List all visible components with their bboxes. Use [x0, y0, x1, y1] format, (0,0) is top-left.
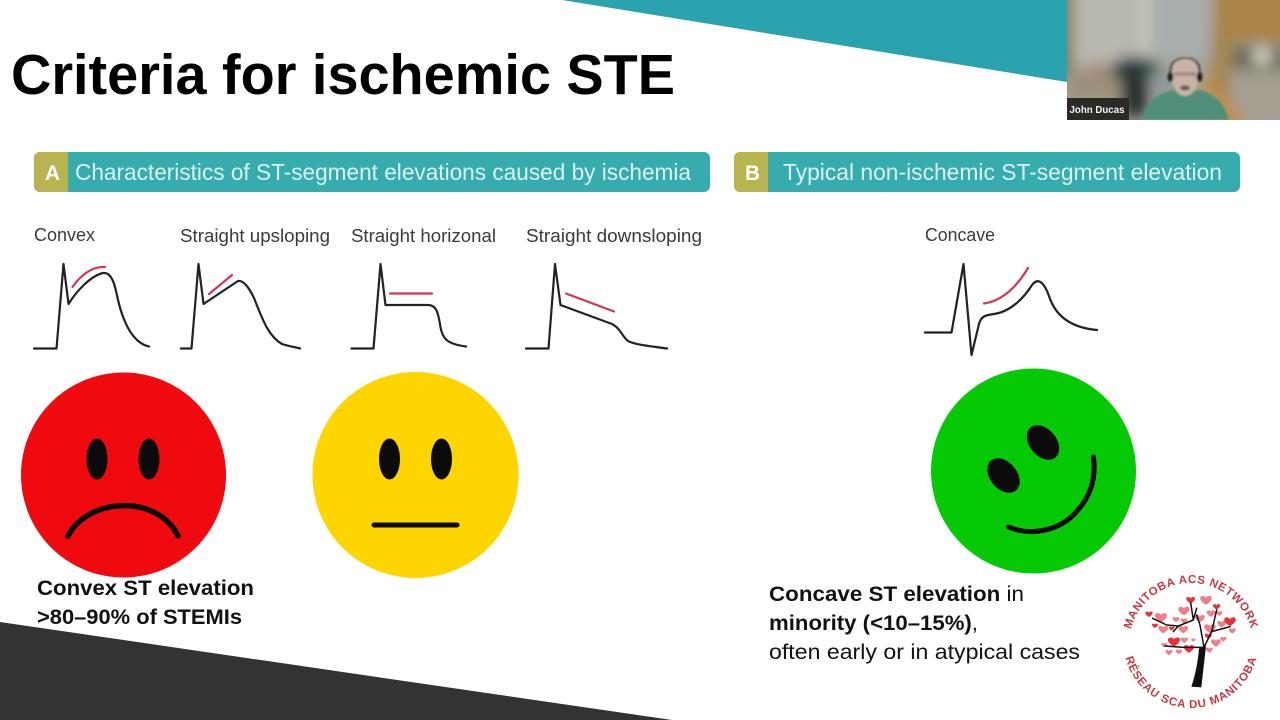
panel A header — [34, 152, 710, 192]
happy green face — [931, 368, 1136, 574]
panel B header: Typical non-ischemic ST-segment elevation — [783, 159, 1222, 185]
convex caption: >80–90% of STEMIs — [37, 606, 242, 629]
trace: straight downsloping: Straight downsloping — [526, 226, 702, 246]
trace: straight horizontal: Straight horizonal — [351, 226, 496, 246]
concave caption: often early or in atypical cases — [769, 641, 1080, 664]
neutral yellow face — [312, 372, 518, 578]
trace: convex: Convex — [34, 225, 95, 245]
trace: straight upsloping — [180, 226, 330, 348]
speaker name tag: John Ducas — [1070, 104, 1125, 116]
speaker figure — [1142, 56, 1229, 120]
title: Criteria for ischemic STE — [11, 43, 675, 107]
panel A header: Characteristics of ST-segment elevations caused by ischemia — [75, 159, 691, 185]
speaker name tag — [1067, 98, 1129, 120]
trace: straight upsloping: Straight upsloping — [180, 226, 330, 246]
panel B header: B — [745, 162, 760, 185]
panel A header: A — [45, 162, 60, 185]
trace: convex — [34, 225, 149, 348]
logo: Manitoba ACS Network — [1124, 575, 1258, 708]
logo tree — [1145, 596, 1236, 687]
trace: concave — [925, 225, 1097, 355]
concave caption: Concave ST elevation in — [769, 583, 1024, 606]
trace: concave: Concave — [925, 225, 995, 245]
logo: Manitoba ACS Network: MANITOBA ACS NETWORK — [1124, 575, 1258, 629]
convex caption — [37, 577, 254, 629]
sad red face — [21, 372, 226, 578]
convex caption: Convex ST elevation — [37, 577, 254, 600]
concave caption — [769, 583, 1080, 664]
concave caption: minority (<10–15%) , — [769, 612, 978, 635]
logo: Manitoba ACS Network: RÉSEAU SCA DU MANITOBA — [1126, 656, 1256, 708]
trace: straight horizontal — [351, 226, 496, 348]
dark corner banner — [0, 622, 672, 720]
webcam video of speaker — [1058, 0, 1280, 127]
teal corner banner — [562, 0, 1067, 82]
panel B header — [734, 152, 1240, 192]
trace: straight downsloping — [526, 226, 702, 348]
